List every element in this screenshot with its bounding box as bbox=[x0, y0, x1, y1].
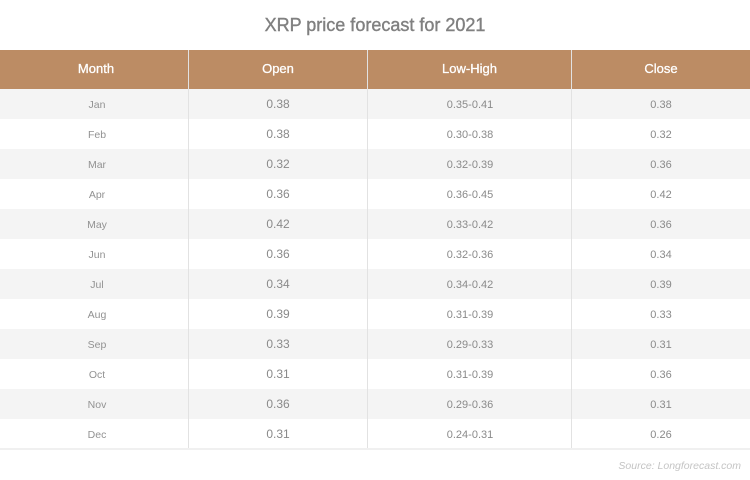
row: Sep: Sep bbox=[88, 339, 106, 351]
row: Oct: 0.31-0.39 bbox=[447, 369, 493, 381]
row: Sep: 0.29-0.33 bbox=[447, 339, 493, 351]
row: Nov: 0.31 bbox=[650, 399, 672, 411]
row: Aug: 0.33 bbox=[650, 309, 672, 321]
row: Sep bbox=[0, 329, 750, 359]
row: Apr bbox=[89, 187, 672, 201]
row: Mar: 0.32 bbox=[266, 157, 290, 171]
row: Sep: 0.33 bbox=[266, 337, 290, 351]
row: Jul: 0.39 bbox=[650, 279, 672, 291]
row: Oct: Oct bbox=[89, 369, 105, 381]
row: Nov: Nov bbox=[88, 399, 106, 411]
row: May: 0.36 bbox=[650, 219, 672, 231]
row: Jun: Jun bbox=[89, 249, 105, 261]
row: Oct: 0.31 bbox=[266, 367, 290, 381]
row: Oct bbox=[89, 367, 672, 381]
source note: Source: Longforecast.com bbox=[618, 460, 741, 472]
row: Feb: Feb bbox=[88, 129, 106, 141]
row: Nov bbox=[0, 389, 750, 419]
row: Jan: 0.38 bbox=[650, 99, 672, 111]
row: Dec: 0.26 bbox=[650, 429, 672, 441]
row: Aug: 0.39 bbox=[266, 307, 290, 321]
row: Mar: 0.36 bbox=[650, 159, 672, 171]
row: Oct: 0.36 bbox=[650, 369, 672, 381]
row: Dec: Dec bbox=[88, 429, 106, 441]
row: Jan: 0.35-0.41 bbox=[447, 99, 493, 111]
row: Mar: 0.32-0.39 bbox=[447, 159, 493, 171]
row: Dec: 0.31 bbox=[266, 427, 290, 441]
row: Jul bbox=[0, 269, 750, 299]
row: Feb: 0.32 bbox=[650, 129, 672, 141]
row: May bbox=[0, 209, 750, 239]
row: Jun: 0.34 bbox=[650, 249, 672, 261]
row: Jun bbox=[88, 247, 672, 261]
row: Jul: 0.34-0.42 bbox=[447, 279, 493, 291]
header: Close: Close bbox=[644, 61, 678, 76]
row: May: 0.33-0.42 bbox=[447, 219, 493, 231]
row: Apr: Apr bbox=[89, 189, 105, 201]
row: Nov: 0.36 bbox=[266, 397, 290, 411]
table header bbox=[0, 50, 750, 89]
row: Jan bbox=[0, 89, 750, 119]
row: Nov: 0.29-0.36 bbox=[447, 399, 493, 411]
row: May: 0.42 bbox=[266, 217, 290, 231]
row: Apr: 0.36-0.45 bbox=[447, 189, 493, 201]
row: Mar: Mar bbox=[88, 159, 106, 171]
row: Jul: 0.34 bbox=[266, 277, 290, 291]
row: Aug: 0.31-0.39 bbox=[447, 309, 493, 321]
row: Jun: 0.36 bbox=[266, 247, 290, 261]
row: Sep: 0.31 bbox=[650, 339, 672, 351]
row: Jan: Jan bbox=[89, 99, 105, 111]
header: Low-High: Low-High bbox=[442, 61, 497, 76]
row: Apr: 0.36 bbox=[266, 187, 290, 201]
row: Feb: 0.30-0.38 bbox=[447, 129, 493, 141]
row: Dec: 0.24-0.31 bbox=[447, 429, 493, 441]
row: Apr: 0.42 bbox=[650, 189, 672, 201]
header: Open: Open bbox=[262, 61, 294, 76]
row: Dec bbox=[88, 427, 672, 441]
row: Jan: 0.38 bbox=[266, 97, 290, 111]
title: XRP price forecast for 2021 bbox=[265, 15, 485, 35]
header: Month: Month bbox=[78, 61, 114, 76]
row: Feb bbox=[88, 127, 672, 141]
row: Aug bbox=[88, 307, 672, 321]
row: Aug: Aug bbox=[88, 309, 106, 321]
row: May: May bbox=[87, 219, 107, 231]
row: Jul: Jul bbox=[90, 279, 104, 291]
row: Jun: 0.32-0.36 bbox=[447, 249, 493, 261]
row: Feb: 0.38 bbox=[266, 127, 290, 141]
row: Mar bbox=[0, 149, 750, 179]
